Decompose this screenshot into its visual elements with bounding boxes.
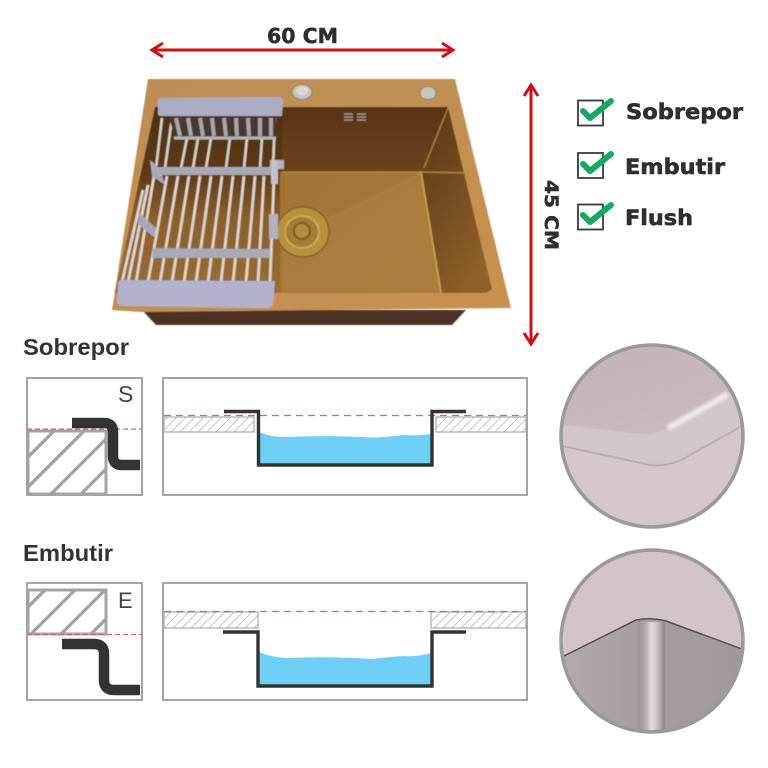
engraved logo	[344, 114, 366, 120]
rack back basket	[168, 117, 276, 137]
red level line	[164, 610, 526, 612]
dimension: height arrow	[524, 85, 538, 344]
rack rails upper	[156, 118, 275, 168]
basin left area seen through rack	[115, 107, 282, 293]
sink lip profile	[62, 644, 140, 690]
rack top handle	[158, 97, 283, 116]
check item: Embutir	[578, 153, 726, 179]
check item: Sobrepor: Sobrepor	[626, 100, 744, 124]
basin back wall	[282, 107, 448, 172]
check item: Flush	[578, 204, 693, 230]
letter E: E	[118, 588, 133, 613]
countertop right	[436, 417, 526, 432]
drying rack	[117, 97, 284, 308]
sink photo	[112, 79, 511, 325]
countertop hatch	[28, 590, 106, 634]
countertop left	[164, 417, 254, 432]
letter S: S	[118, 381, 133, 407]
photo circle: overlay edge detail	[560, 344, 744, 530]
countertop hatch	[28, 431, 106, 494]
sink rim	[112, 79, 511, 312]
countertop right	[431, 612, 526, 628]
dimension: width arrow	[152, 43, 453, 57]
rack bottom handle	[117, 280, 275, 308]
red level line	[27, 428, 142, 430]
dimension: width label: 60 CM	[267, 24, 338, 48]
check item: Sobrepor	[578, 100, 744, 126]
check item: Embutir: Embutir	[625, 155, 726, 179]
diagram: Sobrepor cross section	[163, 378, 527, 495]
diagram: Embutir edge detail	[27, 583, 142, 700]
sink body underside	[142, 310, 466, 325]
diagram: Sobrepor edge detail	[27, 378, 142, 495]
basin right wall	[421, 107, 492, 293]
countertop left	[164, 612, 258, 628]
sink profile	[223, 632, 466, 686]
sink lip profile	[72, 423, 140, 465]
red level line	[27, 634, 142, 636]
water	[259, 652, 431, 685]
dimension: height label: 45 CM	[540, 180, 562, 250]
check item: Flush: Flush	[625, 206, 693, 230]
rack cross bars	[158, 167, 278, 175]
tap hole covers	[292, 84, 436, 100]
rack rails lower	[122, 176, 274, 282]
water	[259, 432, 431, 465]
checklist	[578, 100, 744, 230]
diagram: Embutir cross section	[163, 583, 527, 700]
basin floor	[280, 172, 441, 293]
heading: Embutir: Embutir	[23, 540, 113, 566]
photo circle: undermount edge detail	[560, 549, 744, 735]
drain	[277, 207, 329, 257]
sink profile	[224, 412, 466, 465]
red level line	[164, 414, 526, 416]
heading: Sobrepor: Sobrepor	[23, 334, 129, 360]
